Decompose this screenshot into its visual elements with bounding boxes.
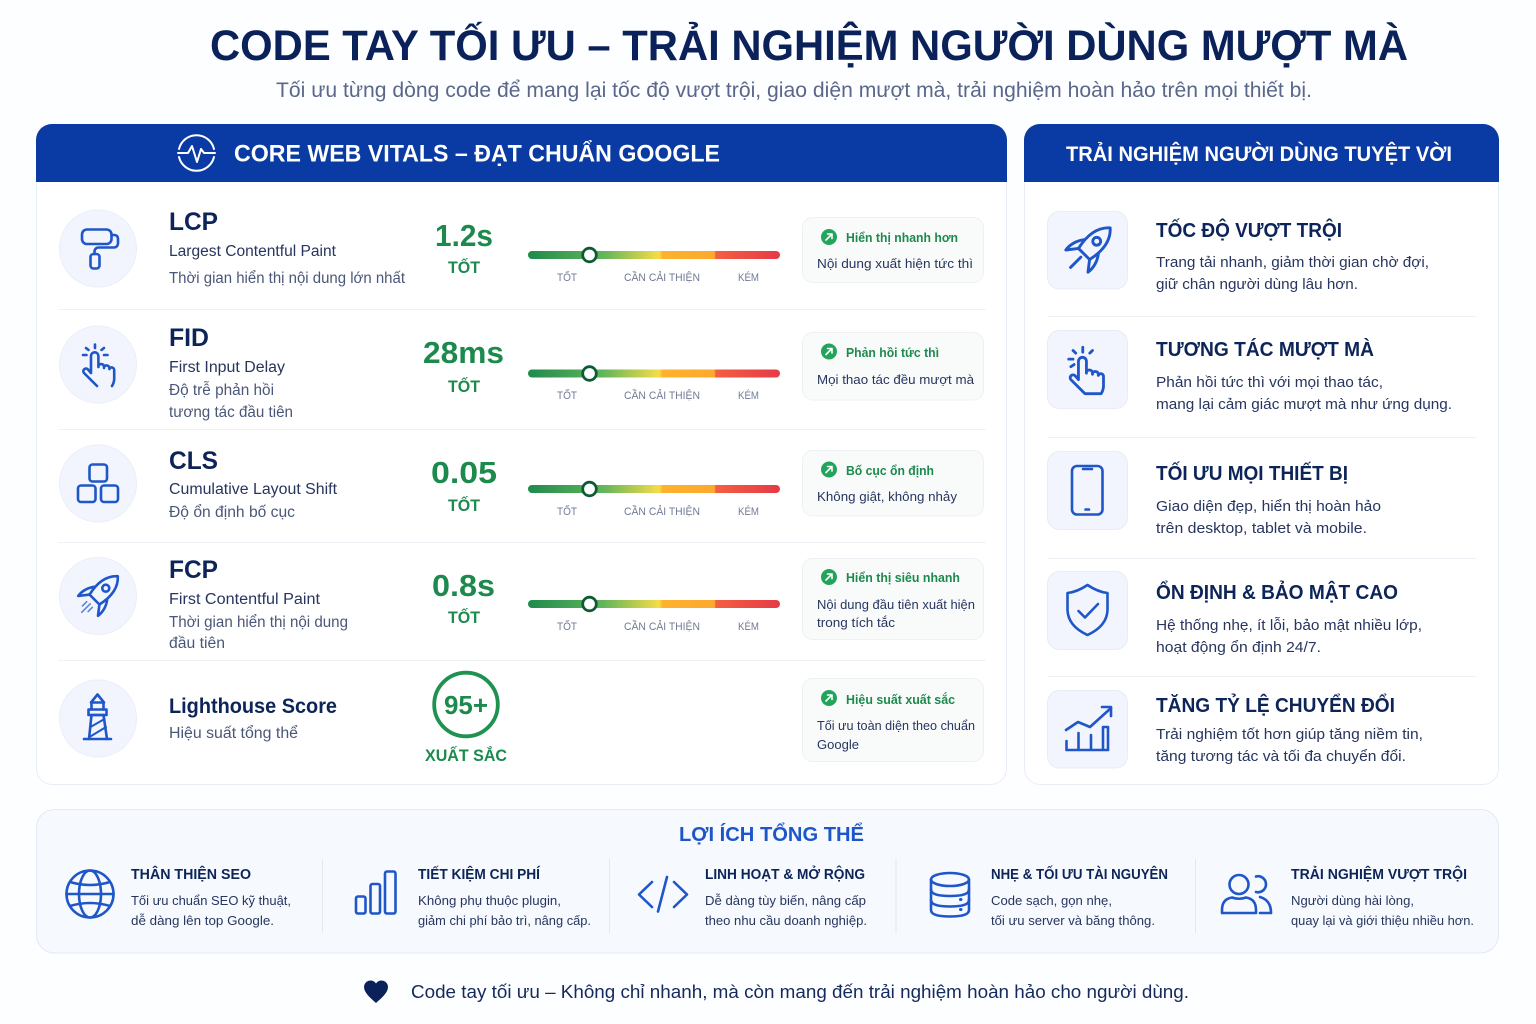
panel heading: LỢI ÍCH TỔNG THỂ [679,822,864,846]
callout card [802,218,984,282]
metric description: đầu tiên [169,635,225,652]
benefit title: LINH HOẠT & MỞ RỘNG [705,865,865,883]
gauge bar [528,248,780,284]
panel header: user experience: TRẢI NGHIỆM NGƯỜI DÙNG TUYỆT VỜI [1066,142,1452,166]
panel: core web vitals [36,124,1007,784]
feature title: TỐC ĐỘ VƯỢT TRỘI [1156,218,1342,242]
gauge bar: TỐT [557,619,577,633]
icon: heart [364,980,388,1003]
metric description: Thời gian hiển thị nội dung [169,614,348,631]
feature title: TĂNG TỶ LỆ CHUYỂN ĐỔI [1156,693,1395,717]
feature description: Trang tải nhanh, giảm thời gian chờ đợi, [1156,254,1429,271]
icon: code brackets [639,877,687,912]
metric full name: First Contentful Paint [169,591,321,608]
callout card: Hiển thị siêu nhanh [846,571,960,585]
metric description: tương tác đầu tiên [169,404,293,421]
feature description: mang lại cảm giác mượt mà như ứng dụng. [1156,396,1452,413]
metric value: 28ms [423,335,504,370]
feature title: TỐI ƯU MỌI THIẾT BỊ [1156,461,1348,485]
callout card: Nội dung đầu tiên xuất hiện [817,597,975,612]
feature: conversion [1048,690,1423,768]
feature description: giữ chân người dùng lâu hơn. [1156,276,1358,293]
feature description [1156,254,1429,293]
callout card [802,332,984,400]
feature: speed [1048,212,1429,293]
callout card: Mọi thao tác đều mượt mà [817,372,975,387]
metric rating: TỐT [448,495,481,515]
metric full name: Cumulative Layout Shift [169,481,338,498]
gauge bar: TỐT [557,504,577,518]
benefit title: NHẸ & TỐI ƯU TÀI NGUYÊN [991,865,1168,883]
feature title: TƯƠNG TÁC MƯỢT MÀ [1156,338,1374,361]
gauge bar: KÉM [738,271,759,284]
benefit description [705,893,867,928]
metric full name: Largest Contentful Paint [169,243,337,260]
metric value: 1.2s [435,218,493,253]
panel header: core web vitals [36,124,1007,182]
title: CODE TAY TỐI ƯU – TRẢI NGHIỆM NGƯỜI DÙNG MƯỢT MÀ [210,21,1408,70]
metric name: FCP [169,556,218,584]
benefit description: Không phụ thuộc plugin, [418,893,561,908]
metric rating: TỐT [448,257,481,277]
benefit description: quay lại và giới thiệu nhiều hơn. [1291,913,1474,928]
icon: rocket [60,558,136,634]
score ring [434,673,498,736]
metric description: Độ trễ phản hồi [169,382,274,399]
footer message: Code tay tối ưu – Không chỉ nhanh, mà còn mang đến trải nghiệm hoàn hảo cho người dùng. [411,981,1189,1002]
metric value: 0.05 [431,455,497,490]
gauge bar: KÉM [738,389,759,402]
callout card [802,450,984,516]
metric full name: First Input Delay [169,359,285,376]
feature description [1156,617,1422,656]
callout card: Tối ưu toàn diện theo chuẩn [817,718,975,733]
benefit title: THÂN THIỆN SEO [131,865,251,883]
benefit description [131,893,291,928]
gauge bar: CẦN CẢI THIỆN [624,505,700,518]
feature description: tăng tương tác và tối đa chuyển đổi. [1156,748,1406,765]
panel header: user experience [1024,124,1499,182]
icon: users [1222,875,1271,913]
icon: rocket [1048,212,1128,289]
callout card [802,558,984,640]
benefit description: theo nhu cầu doanh nghiệp. [705,913,867,928]
benefit description [1291,893,1474,928]
benefit description: Dễ dàng tùy biến, nâng cấp [705,893,866,908]
feature description: Phản hồi tức thì với mọi thao tác, [1156,374,1383,391]
benefit description [418,893,591,928]
benefit description: tối ưu server và băng thông. [991,913,1155,928]
benefit description: giảm chi phí bảo trì, nâng cấp. [418,913,591,928]
feature description [1156,498,1381,537]
icon: growth chart [1048,690,1128,768]
icon: shield check [1048,572,1128,650]
gauge bar [528,482,780,518]
metric row: Lighthouse [60,673,984,765]
callout card: Hiển thị nhanh hơn [846,231,958,245]
icon: bars [356,872,396,914]
metric rating: TỐT [448,607,481,627]
benefit: cost saving [356,865,591,928]
benefit description: Code sạch, gọn nhẹ, [991,893,1112,908]
panel heading: CORE WEB VITALS – ĐẠT CHUẨN GOOGLE [234,140,720,168]
feature title: ỔN ĐỊNH & BẢO MẬT CAO [1156,580,1398,604]
icon: smartphone [1048,452,1128,530]
callout card: Không giật, không nhảy [817,489,958,504]
gauge bar [528,367,780,402]
feature: smooth interaction [1048,330,1452,413]
benefit description [991,893,1155,928]
benefit description: Tối ưu chuẩn SEO kỹ thuật, [131,893,291,908]
metric row: FCP [60,556,984,652]
metric rating: TỐT [448,376,481,396]
feature: all devices [1048,452,1381,537]
gauge bar: TỐT [557,388,577,402]
gauge bar [528,597,780,633]
metric description [169,614,348,652]
gauge bar: CẦN CẢI THIỆN [624,389,700,402]
callout card: Phản hồi tức thì [846,346,939,360]
icon: tapping hand [1048,330,1128,408]
benefit: lightweight [931,865,1168,928]
metric name: CLS [169,447,218,475]
icon: globe [66,870,114,918]
metric row: CLS [60,445,984,522]
score ring: 95+ [444,690,488,720]
benefit title: TIẾT KIỆM CHI PHÍ [418,865,541,883]
icon: tapping hand [60,326,136,403]
metric row: FID [60,324,984,421]
metric row: LCP [60,208,984,287]
footer [364,980,1189,1003]
gauge bar: KÉM [738,505,759,518]
icon: heartbeat gauge [178,135,215,171]
metric value: 0.8s [432,568,495,603]
metric description [169,382,293,421]
benefit title: TRẢI NGHIỆM VƯỢT TRỘI [1291,865,1467,883]
metric description: Thời gian hiển thị nội dung lớn nhất [169,270,406,287]
metric description: Độ ổn định bố cục [169,504,295,521]
feature description [1156,726,1423,765]
feature description: Hệ thống nhẹ, ít lỗi, bảo mật nhiều lớp, [1156,617,1422,634]
gauge bar: CẦN CẢI THIỆN [624,271,700,284]
icon: database [931,873,969,916]
metric name: Lighthouse Score [169,694,337,718]
callout card: Hiệu suất xuất sắc [846,692,955,707]
callout card: Google [817,737,859,752]
subtitle: Tối ưu từng dòng code để mang lại tốc độ vượt trội, giao diện mượt mà, trải nghiệm hoàn hảo trên mọi thiết bị. [276,78,1312,102]
panel: user experience [1024,124,1499,784]
feature description: hoạt động ổn định 24/7. [1156,639,1321,656]
feature: stability and security [1048,572,1422,656]
callout card: Bố cục ổn định [846,464,934,478]
feature description [1156,374,1452,413]
icon: paint roller [60,210,136,287]
metric rating: XUẤT SẮC [425,746,507,765]
icon: layout blocks [60,445,136,522]
gauge bar: CẦN CẢI THIỆN [624,620,700,633]
gauge bar: KÉM [738,620,759,633]
gauge bar: TỐT [557,270,577,284]
feature description: Trải nghiệm tốt hơn giúp tăng niềm tin, [1156,726,1423,743]
benefit: superior experience [1222,865,1474,928]
metric description: Hiệu suất tổng thể [169,725,298,742]
panel: overall benefits [36,810,1498,953]
icon: lighthouse [60,680,136,757]
callout card: trong tích tắc [817,615,896,630]
feature description: trên desktop, tablet và mobile. [1156,520,1367,537]
metric name: LCP [169,208,218,236]
feature description: Giao diện đẹp, hiển thị hoàn hảo [1156,498,1381,515]
callout card: Nội dung xuất hiện tức thì [817,256,973,271]
benefit description: Người dùng hài lòng, [1291,893,1414,908]
metric name: FID [169,324,209,352]
benefit: SEO [66,865,291,928]
callout card [802,678,984,762]
benefit: flexibility [639,865,867,928]
benefit description: dễ dàng lên top Google. [131,913,274,928]
